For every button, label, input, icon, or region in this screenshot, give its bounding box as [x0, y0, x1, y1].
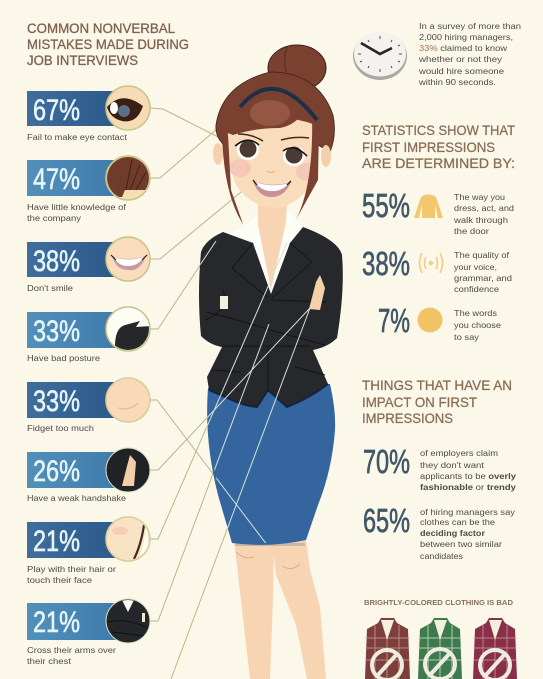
- stat 1: eye contact: Fail to make eye contact: [27, 132, 128, 142]
- stat: 65%: deciding factor: [420, 528, 486, 538]
- eyes: [235, 140, 307, 166]
- ears: [213, 143, 331, 167]
- stat: 38%: grammar, and: [454, 273, 512, 283]
- smile: [253, 180, 291, 197]
- stat 8: crossed arms: their chest: [27, 656, 72, 666]
- stat 6: handshake: Have a weak handshake: [27, 493, 126, 503]
- stat: 55%: The way you: [454, 192, 505, 202]
- stat 2: knowledge: [27, 155, 150, 223]
- stat: 7%: The words: [454, 308, 497, 318]
- stat 7: hair or face: touch their face: [27, 575, 92, 585]
- hand: [309, 275, 325, 310]
- cuff: [220, 296, 228, 309]
- bangs: [225, 92, 310, 135]
- stat: 70%: [363, 443, 516, 492]
- stat 3: smile: Don't smile: [27, 283, 73, 293]
- leader lines over clothing: [200, 240, 310, 543]
- stat 3: smile: 38%: [33, 245, 80, 278]
- icon: smile: [106, 237, 150, 281]
- stat: 38%: your voice,: [454, 262, 497, 272]
- title: MISTAKES MADE DURING: [27, 37, 189, 53]
- figure: woman: [199, 45, 343, 679]
- face: [228, 118, 318, 208]
- jacket: [199, 227, 343, 407]
- heading: things that impact: [362, 378, 512, 427]
- stat 8: crossed arms: Cross their arms over: [27, 645, 116, 655]
- stat 2: knowledge: the company: [27, 213, 82, 223]
- stat: 55%: dress, act, and: [454, 203, 514, 213]
- stat: 65%: of hiring managers say: [420, 507, 516, 517]
- heading: things that impact: IMPRESSIONS: [362, 411, 453, 427]
- stat: 55%: walk through: [453, 215, 508, 225]
- stat 7: hair or face: [27, 517, 150, 585]
- stat: 7%: you choose: [454, 320, 501, 330]
- stat: 7%: to say: [454, 332, 480, 342]
- icon: crossed arms: [106, 599, 150, 643]
- stat: 65%: candidates: [420, 551, 463, 561]
- hair back: [216, 72, 334, 152]
- survey text: whether or not they: [418, 54, 503, 64]
- side strands: [222, 115, 319, 225]
- stat 4: posture: 33%: [33, 315, 80, 348]
- icon: red plaid jacket: [365, 618, 410, 679]
- stat 7: hair or face: Play with their hair or: [27, 564, 116, 574]
- stat: 38%: [362, 245, 512, 294]
- stat: 65%: between two similar: [420, 539, 502, 549]
- stat: 70%: 70%: [363, 443, 410, 480]
- stat: 65%: clothes can be the: [420, 517, 495, 527]
- heading: first impressions: ARE DETERMINED BY:: [362, 156, 515, 172]
- stat 8: crossed arms: 21%: [33, 606, 80, 639]
- survey text: [418, 21, 521, 87]
- icon: maroon plaid jacket: [473, 618, 517, 679]
- icon: speech bubble: [418, 308, 442, 332]
- stat 3: smile: [27, 237, 150, 293]
- stat: 70%: of employers claim: [420, 448, 498, 458]
- survey text: would hire someone: [418, 66, 504, 76]
- nose: [267, 171, 275, 172]
- stat 7: hair or face: 21%: [33, 525, 80, 558]
- stat: 70%: they don't want: [420, 460, 485, 470]
- stat 5: fidget: [27, 378, 150, 433]
- stat: 70%: fashionable or trendy: [420, 482, 516, 492]
- eyebrows: [238, 134, 309, 141]
- icon: hair: [105, 155, 150, 200]
- stat: 38%: The quality of: [454, 250, 510, 260]
- heading: first impressions: FIRST IMPRESSIONS: [362, 140, 495, 156]
- blush: [229, 159, 318, 181]
- stat 5: fidget: Fidget too much: [27, 423, 94, 433]
- survey text: 33% claimed to know: [419, 43, 508, 53]
- neck and collar: [223, 200, 317, 294]
- stat: 7%: 7%: [378, 302, 410, 339]
- headband: [240, 89, 317, 120]
- title: COMMON NONVERBAL: [27, 21, 175, 37]
- stat 8: crossed arms: [27, 599, 150, 666]
- stat: 55%: 55%: [362, 187, 410, 224]
- icon: clock: [353, 32, 407, 80]
- icon: sound: [420, 253, 442, 273]
- stat 2: knowledge: 47%: [33, 163, 80, 196]
- stat 6: handshake: [27, 448, 150, 503]
- legs: [234, 540, 326, 679]
- survey text: within 90 seconds.: [418, 77, 496, 87]
- stat 2: knowledge: Have little knowledge of: [27, 202, 127, 212]
- heading: first impressions: STATISTICS SHOW THAT: [362, 123, 515, 139]
- stat 1: eye contact: [27, 86, 150, 142]
- stat: 55%: the door: [454, 226, 489, 236]
- heading: things that impact: IMPACT ON FIRST: [362, 395, 477, 411]
- heading: things that impact: THINGS THAT HAVE AN: [362, 378, 512, 394]
- stat 1: eye contact: 67%: [33, 94, 80, 127]
- icon: jacket: [414, 194, 443, 218]
- icon: eye: [106, 86, 150, 130]
- leader lines: [150, 108, 310, 679]
- survey text: 2,000 hiring managers,: [419, 32, 513, 42]
- icon: green plaid jacket: [418, 618, 462, 679]
- stat: 70%: applicants to be overly: [420, 471, 516, 481]
- heading: first impressions: [362, 123, 515, 172]
- title: [27, 21, 189, 69]
- heading: brightly colored clothing: BRIGHTLY-COLORED CLOTHING IS BAD: [364, 598, 514, 607]
- stat 4: posture: [27, 307, 150, 363]
- stat: 38%: confidence: [454, 284, 499, 294]
- stat 6: handshake: 26%: [33, 455, 80, 488]
- stat: 7%: [378, 302, 501, 342]
- title: JOB INTERVIEWS: [27, 53, 138, 69]
- survey text: In a survey of more than: [419, 21, 521, 31]
- stat: 65%: 65%: [363, 502, 410, 539]
- icon: hand: [106, 448, 150, 492]
- stat: 38%: 38%: [362, 245, 410, 282]
- skirt: [207, 384, 335, 545]
- stat: 65%: [363, 502, 516, 561]
- icon: face and hair: [106, 517, 150, 561]
- stat 4: posture: Have bad posture: [27, 353, 100, 363]
- stat 5: fidget: 33%: [33, 385, 80, 418]
- icon: knee: [106, 378, 150, 422]
- bun: [268, 45, 326, 91]
- icon: shoulder: [106, 307, 150, 352]
- stat: 55%: [362, 187, 514, 236]
